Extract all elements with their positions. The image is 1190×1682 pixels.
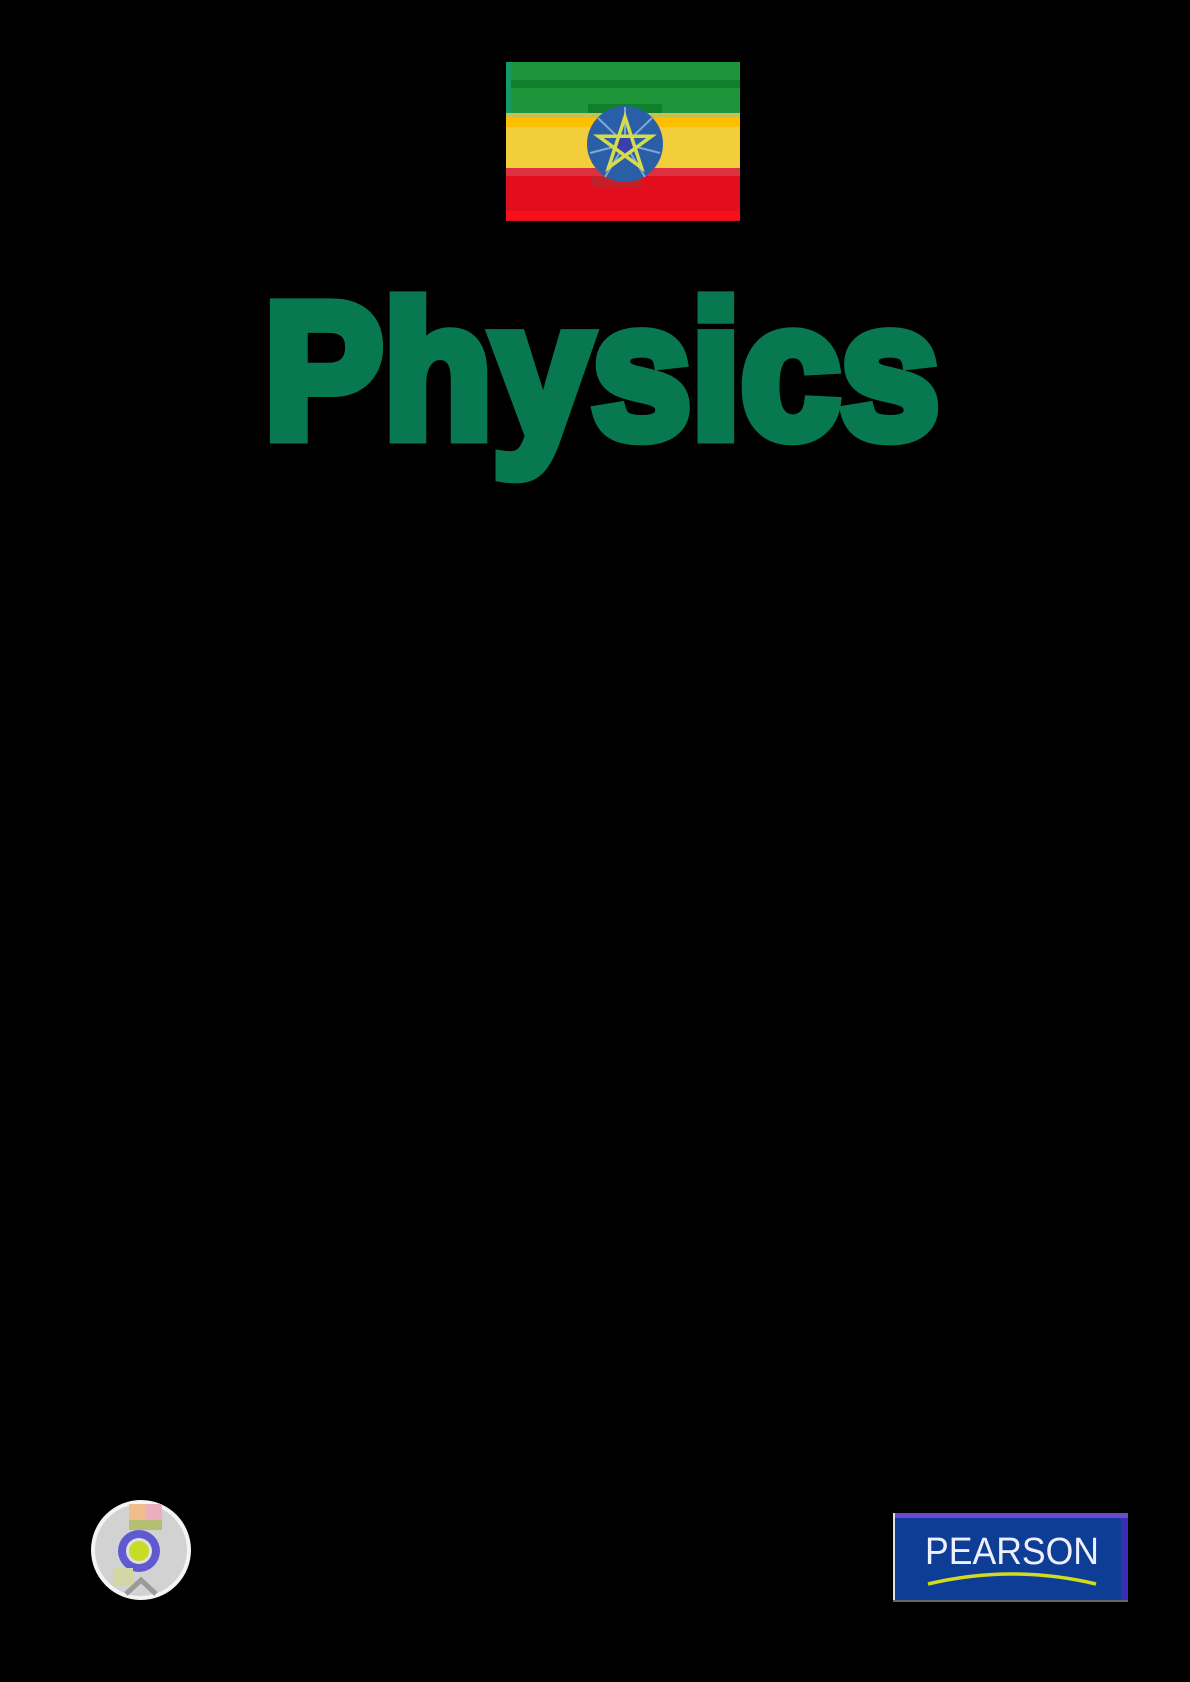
swoosh — [928, 1574, 1096, 1584]
logo: Pearson — [893, 1513, 1128, 1602]
icon: Ethiopian flag — [506, 62, 740, 221]
wordmark: PEARSON — [925, 1531, 1099, 1573]
title: Physics: Physics — [264, 263, 940, 478]
icon: ministry seal — [93, 1502, 189, 1598]
